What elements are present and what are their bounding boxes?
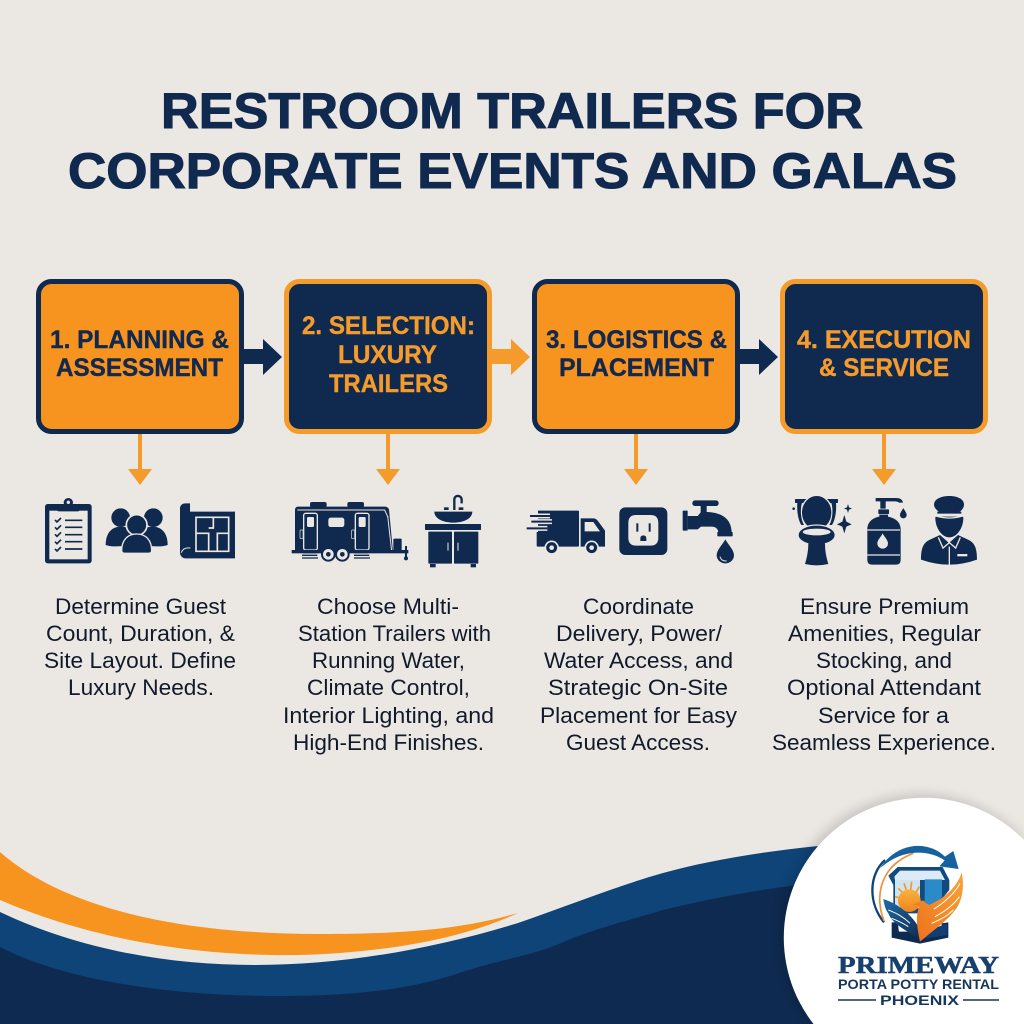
step 4 description: Ensure Premium <box>800 594 969 619</box>
step 1 box: planning and assessment: 1. PLANNING & <box>50 326 229 354</box>
icon: sink vanity <box>425 496 481 567</box>
footer waves <box>0 844 840 1024</box>
step 4 description: Optional Attendant <box>787 675 982 700</box>
logo badge <box>781 795 1024 1024</box>
step 3 description: Coordinate <box>583 594 694 619</box>
step 3 description: Guest Access. <box>566 730 710 755</box>
step 2 description: High-End Finishes. <box>293 730 484 755</box>
step 2 box: selection luxury trailers <box>286 282 490 432</box>
step 1 description: Count, Duration, & <box>46 621 235 646</box>
logo wordmark: PRIMEWAY <box>838 953 999 979</box>
arrow: step 1 to step 2 <box>244 339 282 375</box>
step 1 description: Determine Guest <box>55 594 227 619</box>
icon: power outlet <box>619 507 667 555</box>
arrow: step 2 to step 3 <box>492 339 530 375</box>
step 4 box: execution and service: & SERVICE <box>819 354 949 382</box>
step 2 description: Climate Control, <box>307 675 470 700</box>
icon: clipboard checklist <box>45 498 92 563</box>
logo wordmark: PORTA POTTY RENTAL <box>838 976 999 992</box>
step 1 description: Site Layout. Define <box>44 648 236 673</box>
step 4 description: Service for a <box>818 703 949 728</box>
title: CORPORATE EVENTS AND GALAS <box>68 143 957 199</box>
logo wordmark: PHOENIX <box>880 992 960 1008</box>
step 2 description <box>283 594 494 755</box>
step 4 description: Seamless Experience. <box>772 730 996 755</box>
step 3 description: Water Access, and <box>544 648 733 673</box>
step 1 box: planning and assessment: ASSESSMENT <box>56 354 223 382</box>
arrow: step 3 to step 4 <box>740 339 778 375</box>
icon: blueprint floor plan <box>180 503 235 558</box>
logo wordmark <box>838 953 999 1008</box>
icon: uniformed attendant <box>921 496 977 566</box>
step 4 box: execution and service <box>782 282 986 432</box>
step 3 description: Strategic On-Site <box>548 675 728 700</box>
step 1 description: Luxury Needs. <box>68 675 214 700</box>
step 4 box: execution and service: 4. EXECUTION <box>797 326 971 354</box>
icon: group of people <box>106 508 168 553</box>
step 2 description: Choose Multi- <box>317 594 459 619</box>
step 4 description <box>772 594 996 755</box>
icons for steps 1 and 2 <box>45 496 481 567</box>
icon: clean toilet with sparkles <box>792 495 852 565</box>
arrow: step 3 down <box>624 434 648 485</box>
step 1 box: planning and assessment <box>38 282 242 432</box>
icon: delivery truck <box>527 510 605 554</box>
step 2 box: selection luxury trailers: LUXURY <box>338 341 437 369</box>
step 4 description: Amenities, Regular <box>788 621 982 646</box>
step 2 description: Station Trailers with <box>298 621 491 646</box>
icon: water tap with drop <box>683 500 734 563</box>
step 3 box: logistics and placement: PLACEMENT <box>559 354 714 382</box>
step 2 box: selection luxury trailers: TRAILERS <box>329 370 448 398</box>
icons for steps 3 and 4 <box>527 495 977 566</box>
step 3 box: logistics and placement <box>534 282 738 432</box>
step 3 box: logistics and placement: 3. LOGISTICS & <box>546 326 727 354</box>
step 1 description <box>44 594 236 700</box>
step 3 description <box>540 594 738 755</box>
title: RESTROOM TRAILERS FOR <box>161 83 863 139</box>
step 3 description: Placement for Easy <box>540 703 738 728</box>
step 3 description: Delivery, Power/ <box>556 621 723 646</box>
step 2 description: Running Water, <box>312 648 465 673</box>
step 4 description: Stocking, and <box>816 648 952 673</box>
title <box>68 83 957 199</box>
arrow: step 4 down <box>872 434 896 485</box>
icon: travel trailer <box>292 502 408 561</box>
step 2 box: selection luxury trailers: 2. SELECTION: <box>302 312 475 340</box>
step 2 description: Interior Lighting, and <box>283 703 494 728</box>
logo emblem <box>872 846 963 944</box>
arrow: step 1 down <box>128 434 152 485</box>
arrow: step 2 down <box>376 434 400 485</box>
icon: soap dispenser <box>867 498 907 565</box>
